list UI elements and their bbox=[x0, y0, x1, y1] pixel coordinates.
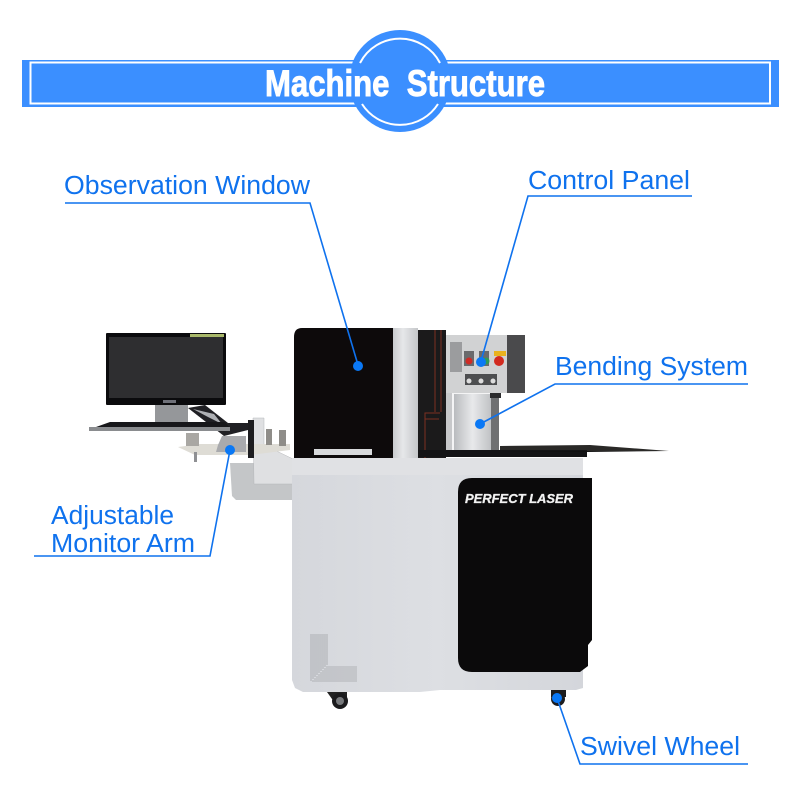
window handle bbox=[314, 449, 372, 455]
bending system bbox=[418, 393, 669, 457]
vent bbox=[311, 634, 357, 681]
callout: adjustable monitor arm: Adjustable bbox=[51, 502, 174, 530]
callout: adjustable monitor arm: Monitor Arm bbox=[51, 530, 195, 558]
body top strip bbox=[292, 458, 583, 475]
side door bbox=[458, 478, 592, 672]
title banner bbox=[22, 30, 779, 132]
callout: control panel: Control Panel bbox=[528, 167, 690, 195]
right wheel bbox=[551, 690, 566, 706]
light column bbox=[393, 328, 418, 458]
observation window bbox=[294, 328, 393, 458]
callout: observation window bbox=[64, 172, 363, 371]
machine body bbox=[292, 458, 583, 692]
keyboard tray bbox=[89, 422, 230, 431]
machine bbox=[89, 328, 669, 709]
callout: adjustable monitor arm bbox=[34, 445, 235, 558]
callout: bending system: Bending System bbox=[555, 353, 748, 381]
callout: swivel wheel: Swivel Wheel bbox=[580, 733, 740, 761]
callout: swivel wheel bbox=[552, 693, 748, 764]
callout: control panel bbox=[476, 167, 692, 367]
callout: bending system bbox=[475, 353, 748, 429]
monitor bbox=[106, 333, 226, 422]
monitor arm assembly bbox=[178, 405, 293, 500]
left wheel bbox=[327, 692, 348, 709]
title: Machine Structure bbox=[265, 63, 545, 104]
control panel bbox=[446, 335, 525, 393]
callout: observation window: Observation Window bbox=[64, 172, 311, 200]
brand logo: PERFECT LASER bbox=[465, 491, 574, 506]
dark column bbox=[418, 330, 446, 458]
